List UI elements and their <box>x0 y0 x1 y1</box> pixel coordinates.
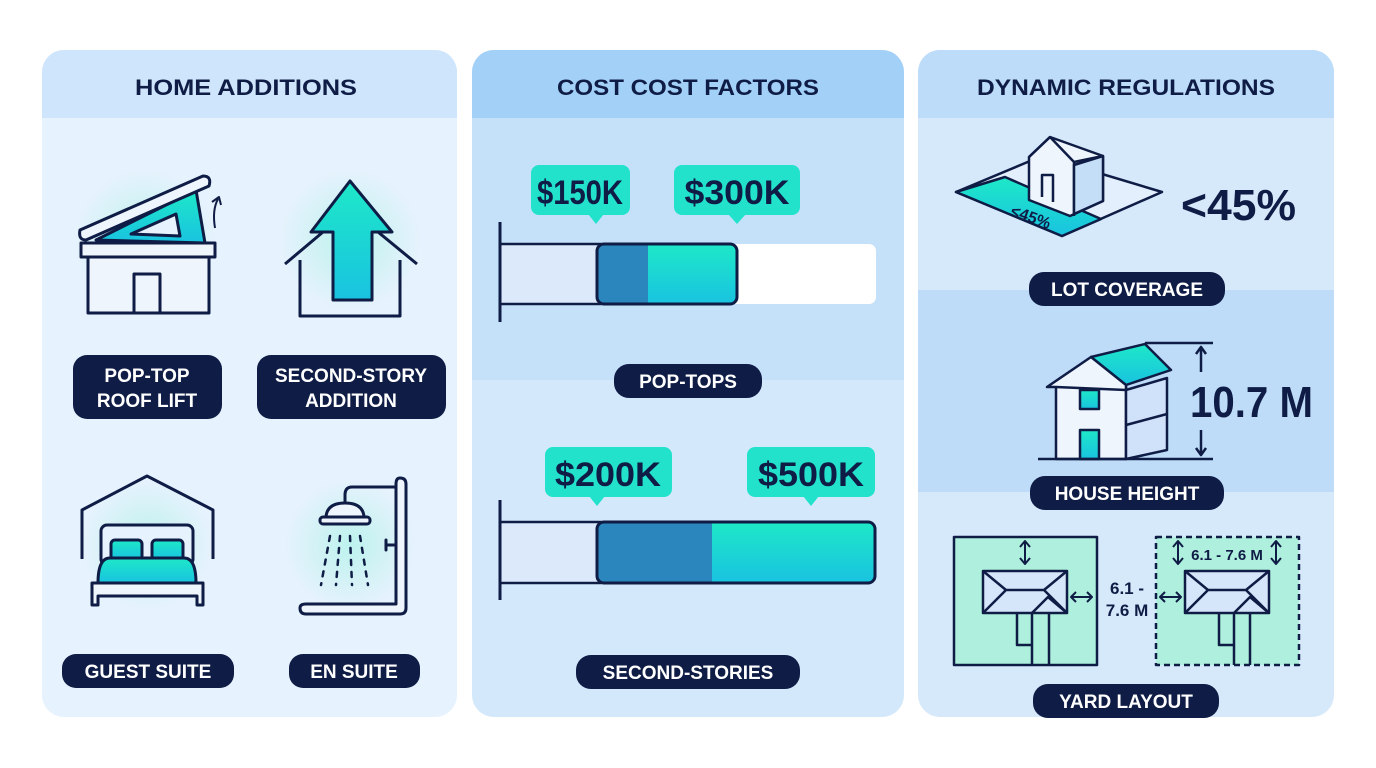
label: yard layout <box>1033 684 1219 718</box>
label: lot coverage: LOT COVERAGE <box>1051 280 1203 301</box>
diagram: yard layout: 7.6 M <box>1106 601 1148 620</box>
label: second-stories <box>576 655 800 689</box>
diagram: yard layout <box>954 537 1299 665</box>
label: house height <box>1030 476 1224 510</box>
chart: second-stories cost bar <box>500 447 875 600</box>
label: second-stories: SECOND-STORIES <box>603 663 773 684</box>
icon: second-story arrow <box>280 170 420 316</box>
diagram: yard layout: 6.1 - <box>1110 579 1144 598</box>
label: guest suite: GUEST SUITE <box>85 662 211 683</box>
label: house height: HOUSE HEIGHT <box>1055 484 1200 505</box>
heading: cost factors: COST COST FACTORS <box>557 75 819 100</box>
callout: $150K: $150K <box>537 174 623 212</box>
icon: en suite shower <box>285 478 415 614</box>
label: pop-top roof lift: POP-TOP <box>104 366 190 387</box>
panel: cost factors <box>472 50 904 717</box>
chart: pop-tops cost bar <box>500 165 876 322</box>
callout: $200K <box>545 447 672 506</box>
panel: dynamic regulations <box>918 50 1334 718</box>
label: pop-tops <box>614 364 762 398</box>
label: pop-top roof lift: ROOF LIFT <box>97 391 198 412</box>
label: lot coverage <box>1029 272 1225 306</box>
label: guest suite <box>62 654 234 688</box>
label: pop-top roof lift <box>73 355 222 419</box>
label: pop-tops: POP-TOPS <box>639 372 737 393</box>
callout: $300K <box>674 165 800 224</box>
icon: lot coverage <box>956 137 1162 236</box>
callout: $300K: $300K <box>684 174 790 212</box>
heading: home additions: HOME ADDITIONS <box>135 75 357 100</box>
icon: lot coverage: <45% <box>1008 203 1053 233</box>
icon: guest suite bed <box>82 476 213 610</box>
panel: home additions <box>42 50 457 717</box>
diagram: yard layout: 6.1 - 7.6 M <box>1191 547 1263 564</box>
callout: $500K: $500K <box>758 456 864 494</box>
callout: $150K <box>531 165 630 224</box>
label: second-story addition: ADDITION <box>305 391 397 412</box>
label: en suite: EN SUITE <box>310 662 398 683</box>
label: en suite <box>289 654 420 688</box>
heading: dynamic regulations: DYNAMIC REGULATIONS <box>977 75 1275 100</box>
callout: $200K: $200K <box>555 456 661 494</box>
callout: $500K <box>747 447 875 506</box>
text: <45%: <45% <box>1181 181 1296 230</box>
label: yard layout: YARD LAYOUT <box>1059 692 1193 713</box>
icon: pop-top roof <box>75 170 221 313</box>
label: second-story addition: SECOND-STORY <box>275 366 427 387</box>
icon: house height <box>1038 343 1213 459</box>
text: 10.7 M: 10.7 M <box>1190 378 1313 427</box>
label: second-story addition <box>257 355 446 419</box>
